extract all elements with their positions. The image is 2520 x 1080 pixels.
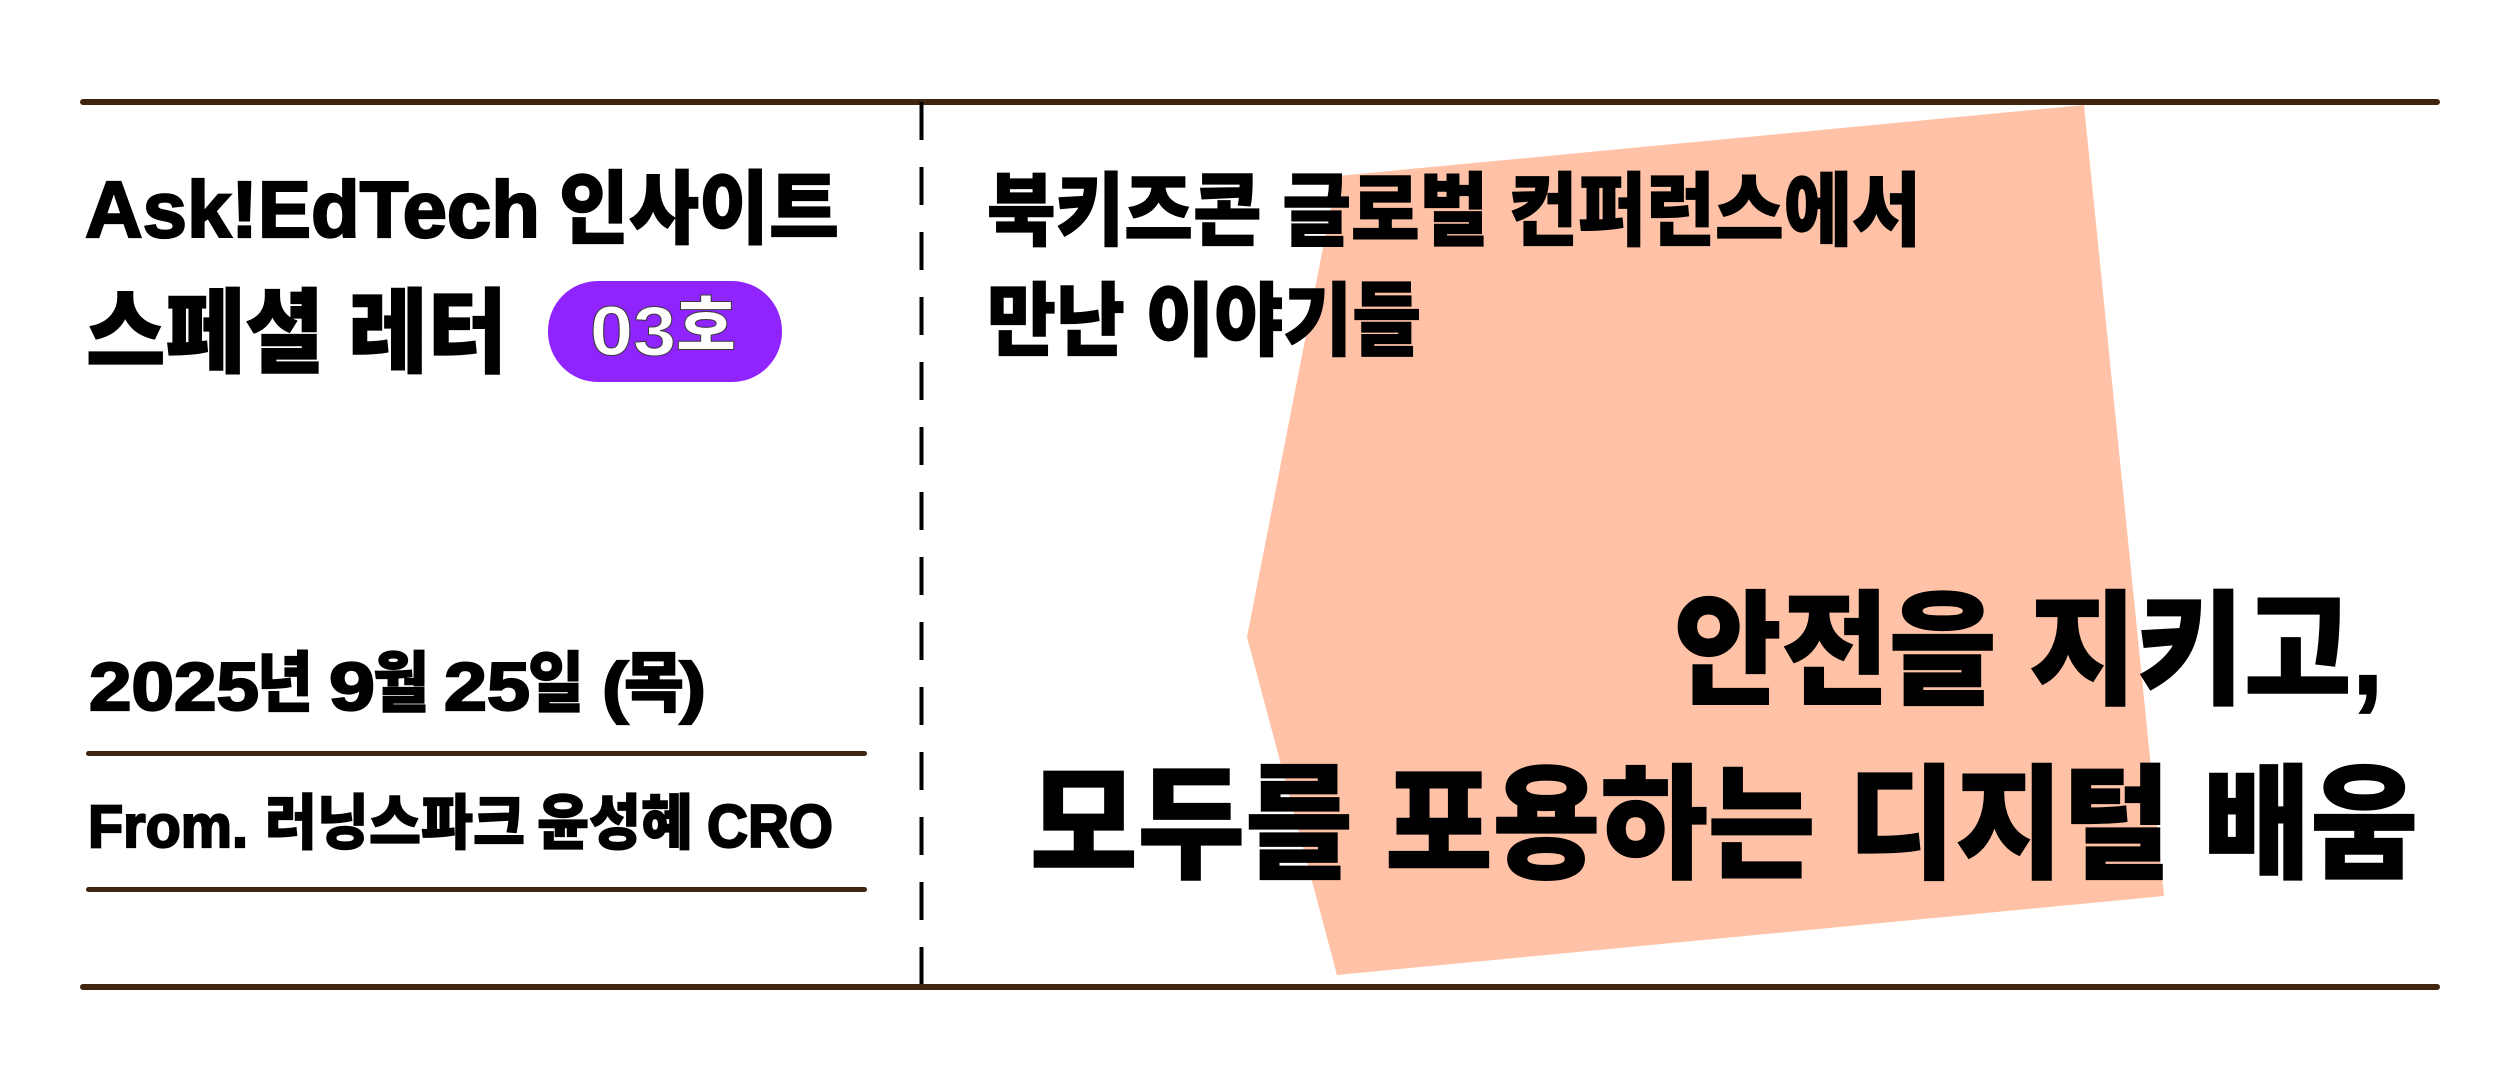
- date: 25: [444, 649, 530, 725]
- left heading: [85, 165, 839, 385]
- main title line 1: 안전을 지키고,: [1674, 583, 2384, 721]
- author: 러닝스파크: [265, 790, 525, 857]
- subtitle line 2: 만난 이야기들: [987, 277, 1421, 366]
- author: From.: [88, 793, 248, 860]
- main title: [1030, 583, 2418, 895]
- subtitle: [987, 167, 1921, 366]
- issue badge: 호: [676, 291, 736, 363]
- heading line 1: 인사이트: [559, 165, 839, 254]
- date: 2025: [89, 649, 259, 725]
- author: CRO: [707, 793, 833, 860]
- date: 일: [528, 646, 584, 720]
- bottom rule: [80, 984, 2440, 990]
- date: 목: [624, 646, 684, 720]
- peach polygon shape: [1247, 105, 2164, 975]
- date: (: [602, 649, 628, 725]
- main title line 2: 모두를 포용하는 디지털 배움: [1030, 757, 2418, 895]
- date: 월: [373, 646, 429, 720]
- date divider rule: [86, 751, 867, 756]
- date: [89, 646, 706, 725]
- issue badge: [548, 281, 782, 382]
- heading line 1: [85, 165, 839, 254]
- author: 윤성혜: [537, 790, 693, 857]
- heading line 2: 스페셜 레터: [86, 283, 507, 385]
- subtitle line 1: 북키즈콘 글로벌 컨퍼런스에서: [987, 167, 1921, 256]
- date: 9: [329, 649, 375, 725]
- issue badge: 03: [590, 292, 676, 370]
- top rule: [80, 99, 2440, 105]
- author divider rule: [86, 887, 867, 892]
- date: 년: [257, 646, 313, 720]
- date: ): [680, 649, 706, 725]
- dashed vertical divider: [920, 102, 924, 984]
- heading line 1: Ask!EdTech: [85, 165, 540, 254]
- author: [88, 790, 833, 860]
